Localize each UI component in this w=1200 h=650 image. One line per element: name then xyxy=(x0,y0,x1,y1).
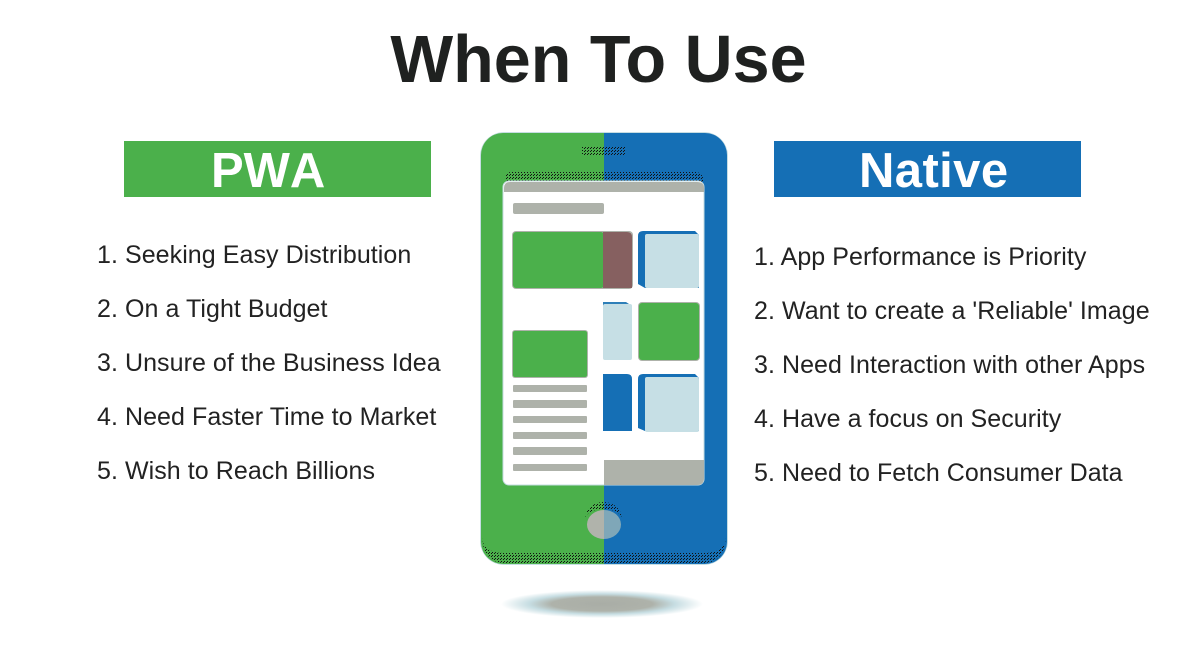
icon: smartphone illustration xyxy=(480,132,728,618)
card: green left xyxy=(512,330,588,378)
screen top shadow xyxy=(505,172,704,182)
PWA item 4: 4. Need Faster Time to Market xyxy=(97,403,436,431)
Native item 3: 3. Need Interaction with other Apps xyxy=(754,351,1145,379)
text lines xyxy=(513,385,587,471)
card: blue and light 1 xyxy=(638,231,699,288)
screen xyxy=(503,181,704,485)
Native item 2: 2. Want to create a 'Reliable' Image xyxy=(754,297,1150,325)
list: Native reasons xyxy=(754,243,1150,487)
footer gray block xyxy=(604,460,704,485)
PWA item 3: 3. Unsure of the Business Idea xyxy=(97,349,441,377)
home button xyxy=(585,502,622,539)
heading: PWA xyxy=(124,141,431,197)
phone body xyxy=(480,132,728,565)
card: blue and light 2 xyxy=(638,374,699,432)
Native item 4: 4. Have a focus on Security xyxy=(754,405,1061,433)
heading: PWA: PWA xyxy=(211,144,325,198)
heading: Native: Native xyxy=(859,144,1008,198)
phone bottom edge xyxy=(482,538,726,563)
PWA item 1: 1. Seeking Easy Distribution xyxy=(97,241,411,269)
phone shadow xyxy=(501,590,703,618)
card: green right xyxy=(638,302,700,361)
Native item 1: 1. App Performance is Priority xyxy=(754,243,1086,271)
title: When To Use xyxy=(390,23,807,97)
card: green and brown xyxy=(512,231,633,289)
Native item 5: 5. Need to Fetch Consumer Data xyxy=(754,459,1123,487)
heading: Native xyxy=(774,141,1081,197)
card: blue column xyxy=(603,374,632,431)
list: PWA reasons xyxy=(97,241,441,485)
PWA item 5: 5. Wish to Reach Billions xyxy=(97,457,375,485)
speaker xyxy=(582,147,626,155)
PWA item 2: 2. On a Tight Budget xyxy=(97,295,328,323)
card: light column xyxy=(603,302,632,360)
